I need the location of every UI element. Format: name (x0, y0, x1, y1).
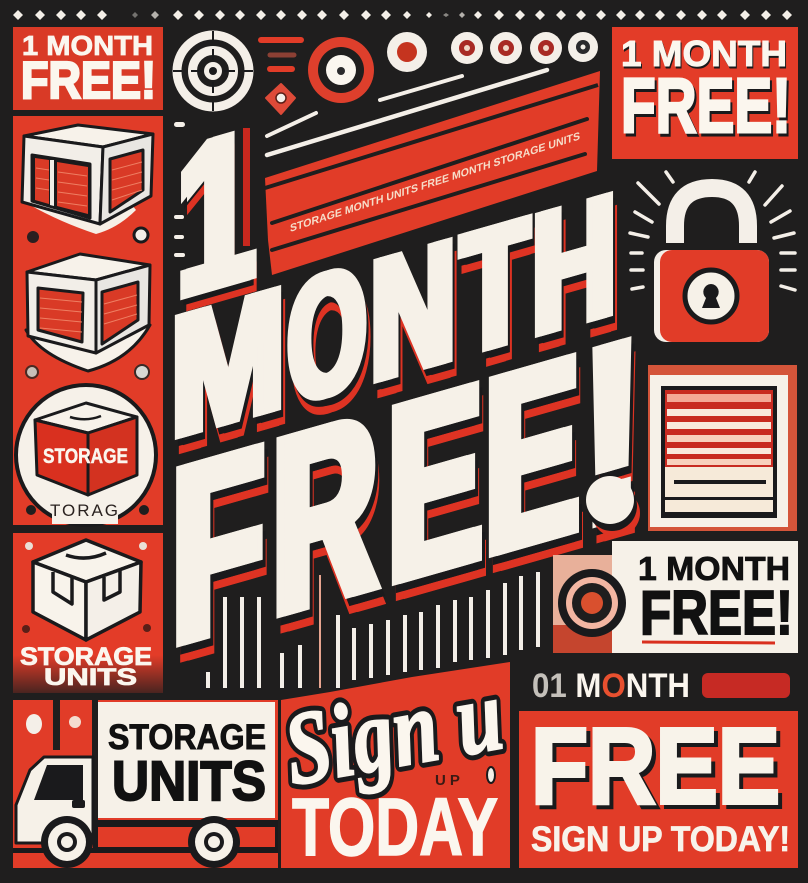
headline: MONTH: M (176, 256, 290, 481)
icon: storage unit 2 (26, 254, 150, 371)
icon: ring row (387, 32, 598, 72)
headline: MONTH: O (285, 229, 363, 443)
headline: MONTH: O (295, 241, 373, 456)
icon: bolt right (135, 365, 149, 379)
headline: FREE!: R (273, 374, 377, 685)
panel: top-left 1 month free (13, 27, 163, 110)
panel: free sign up today: SIGN UP TODAY! (531, 820, 790, 859)
truck cargo box (98, 702, 275, 818)
headline: MONTH (168, 155, 623, 490)
headline: FREE!: F (181, 406, 271, 713)
headline: MONTH: T (468, 194, 536, 406)
icon: bolt dark (27, 231, 39, 243)
headline: FREE!: E (486, 318, 578, 625)
headline: MONTH: H (532, 162, 616, 380)
headline: MONTH: T (458, 182, 526, 394)
headline: FREE!: R (280, 364, 384, 675)
text: up: UP (435, 772, 464, 789)
script: Sign u: Sign u (276, 657, 511, 808)
panel: sign up today (276, 657, 511, 873)
headline: MONTH: H (535, 155, 619, 372)
panel: top-left 1 month free: FREE! (21, 52, 156, 110)
panel: top-right 1 month free: 1 MONTH (621, 33, 787, 74)
panel: roller door (648, 365, 797, 531)
headline: MONTH: T (462, 196, 530, 408)
icon: taped box (33, 540, 141, 640)
headline: FREE!: R (273, 366, 377, 677)
headline: FREE!: E (389, 338, 481, 645)
headline: MONTH: H (533, 170, 617, 388)
headline: FREE! (169, 281, 649, 715)
headline: MONTH: M (171, 257, 285, 482)
icon: target (173, 31, 253, 111)
text: today: TODAY (292, 782, 498, 873)
headline: FREE!: E (396, 336, 488, 643)
headline: MONTH: T (466, 187, 534, 399)
headline: FREE!: E (385, 331, 477, 638)
headline: MONTH: H (529, 156, 613, 374)
icon: ring (558, 569, 626, 637)
top row of dots (13, 10, 792, 20)
headline: MONTH: H (539, 168, 623, 386)
icon: rivets (22, 542, 151, 633)
panel: box storage units (13, 533, 163, 693)
tick bars (208, 572, 538, 688)
big numeral 1: 1 (180, 94, 258, 355)
truck cab (16, 757, 93, 843)
icon: storage box in circle: STORAGE (43, 445, 128, 468)
icon: bolt white (134, 228, 148, 242)
headline: FREE!: F (177, 391, 267, 698)
banner: red slanted stripes (265, 71, 600, 275)
headline: MONTH: T (461, 188, 529, 400)
headline: FREE!: R (281, 372, 385, 683)
headline: MONTH: M (168, 250, 282, 476)
big numeral 1: 1 (174, 83, 252, 344)
icon: storage box in circle (16, 385, 156, 525)
icon: lock rays (630, 172, 795, 290)
icon: padlock (654, 188, 769, 342)
text: storage: STORAGE (20, 643, 152, 671)
wheel: rear (188, 816, 240, 868)
headline: MONTH: M (178, 263, 292, 488)
text: units: UNITS (112, 749, 266, 812)
panel: left column red (13, 116, 163, 525)
panel: truck (13, 700, 278, 868)
headline: FREE!: R (277, 356, 381, 668)
wheel: front (41, 816, 93, 868)
headline: FREE!: F (173, 400, 263, 707)
headline: FREE!: F (180, 398, 270, 705)
headline: FREE!: E (486, 310, 578, 617)
headline: FREE!: F (169, 394, 259, 700)
text: storage: STORAGE (108, 718, 266, 757)
headline: MONTH: O (289, 243, 367, 458)
truck chassis (93, 820, 278, 850)
headline: MONTH: H (537, 161, 621, 379)
headline: FREE!: E (482, 303, 574, 610)
headline: FREE!: ! (583, 290, 641, 589)
icon: storage box in circle: TORAG (50, 501, 118, 520)
headline: FREE!: E (389, 346, 481, 653)
panel: top-right 1 month free (612, 27, 798, 159)
headline: FREE!: R (269, 359, 373, 670)
label: 01 month: 01 MONTH (532, 667, 690, 705)
banner: red slanted stripes: STORAGE MONTH UNITS FREE MONTH STORAGE UNITS (290, 130, 580, 235)
label: 01 month (532, 667, 790, 705)
headline: FREE!: E (397, 344, 489, 651)
icon: bolt left (26, 366, 38, 378)
icon: small mark (487, 767, 495, 783)
headline: MONTH: N (372, 216, 456, 434)
headline: MONTH: N (378, 214, 462, 432)
headline: MONTH: T (464, 180, 532, 392)
headline: FREE!: E (493, 308, 585, 615)
headline: MONTH: O (288, 235, 366, 450)
headline: MONTH: O (291, 227, 369, 442)
headline: MONTH: O (293, 234, 371, 449)
headline: FREE!: ! (579, 283, 637, 582)
script: Sign u: Sign u (276, 657, 511, 808)
panel: white 1 month free: 1 MONTH (638, 550, 790, 587)
headline: FREE!: E (494, 316, 586, 623)
headline: FREE!: E (393, 329, 485, 636)
headline: MONTH: M (172, 265, 286, 490)
headline: MONTH: N (371, 208, 455, 426)
headline: FREE!: ! (587, 281, 645, 580)
headline: FREE!: F (173, 408, 263, 715)
icon: accent dashes (261, 40, 301, 69)
headline: MONTH: N (368, 202, 452, 420)
headline: FREE!: ! (591, 296, 649, 595)
icon: small diamond target (266, 84, 295, 114)
panel: free sign up today (519, 705, 798, 868)
panel: top-right 1 month free: 1 MONTH (622, 35, 788, 76)
icon: storage unit 1 (22, 125, 153, 234)
big numeral 1: 1 (177, 88, 255, 349)
icon: red bullseye (308, 37, 374, 103)
headline: MONTH: N (374, 200, 458, 418)
panel: top-left 1 month free: 1 MONTH (22, 30, 153, 61)
white speed lines (267, 70, 547, 155)
big numeral 1: 1 (180, 81, 258, 342)
headline: FREE!: E (490, 301, 582, 608)
text: units: UNITS (44, 664, 137, 691)
headline: MONTH: M (174, 249, 288, 474)
headline: FREE!: ! (590, 288, 648, 587)
headline: FREE!: ! (583, 298, 641, 597)
panel: white 1 month free (553, 541, 798, 653)
headline: MONTH: N (376, 207, 460, 425)
